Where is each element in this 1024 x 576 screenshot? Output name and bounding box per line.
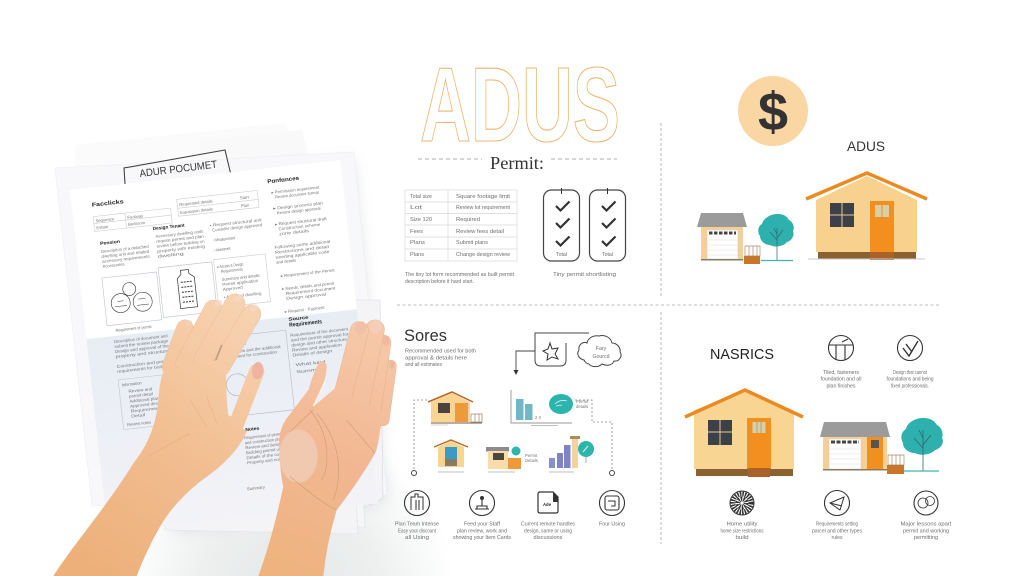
caption: table: description before it hard start. [405, 279, 474, 285]
text box: lower left: Requirement [130, 405, 162, 414]
text column: design [152, 221, 207, 259]
deck [745, 246, 760, 256]
text: funnel: Requirements setting [816, 522, 858, 528]
text block: notes: Building permit unit [246, 446, 285, 455]
heading: source requirements: Requirements [289, 319, 322, 329]
text: sores: and all estimates [405, 362, 442, 368]
text column: notes [209, 217, 265, 253]
illustration: garage [697, 213, 760, 264]
text block: source: Summary [296, 366, 328, 374]
text: check: fixed professionals. [891, 384, 929, 390]
table: left: Sequence [95, 216, 115, 223]
text column: pension [100, 236, 151, 269]
icon: frame [600, 490, 624, 516]
icon: dollar: $ [758, 82, 788, 142]
illustration: shop: Permit [525, 453, 538, 458]
text column: pension: Pension [100, 239, 120, 246]
text: funnel: rules [832, 535, 843, 541]
table: right [177, 190, 259, 216]
table: permit: Change design review [456, 252, 510, 258]
text: sores [405, 348, 476, 368]
title: ADUS: ADUS [420, 46, 620, 164]
divider: horizontal [397, 304, 941, 306]
text: document [521, 522, 575, 541]
caption: box: Requirement of permit [115, 324, 152, 333]
deck [888, 455, 904, 465]
text block: notes: Requirement of permit [244, 431, 283, 440]
text box: lower left [118, 373, 185, 430]
text column: notes: Consider design approved [212, 222, 263, 233]
text: stamp: showing your Item Cards [453, 535, 511, 541]
heading: NASRICS: NASRICS [710, 346, 774, 363]
text: circles [900, 522, 952, 541]
icon: star box [535, 333, 589, 366]
text block: notes: Review and design [245, 441, 284, 450]
text block: lower left: Description of document and [114, 333, 169, 344]
text block: lower left: requirements for building [117, 363, 172, 374]
table: permit: Plans [410, 252, 424, 258]
text column: design: review before building on [156, 238, 205, 249]
table: right: Start [240, 194, 250, 200]
text: sores: approval & details here [405, 356, 467, 362]
text column: right: needing applicable code [275, 249, 330, 260]
text: circles: permit and working [903, 528, 949, 534]
connector: left dashed [412, 400, 427, 476]
text: document: Current remote handles [521, 522, 575, 528]
text box: checklist: Requirements [221, 267, 243, 274]
text column: right: ▸ Requirement of the Permit [280, 267, 335, 278]
icon: clipboard 2 [590, 188, 626, 261]
text box: checklist: Approved [223, 285, 244, 292]
chart: bars one: Permit [576, 399, 589, 404]
text column: right [268, 184, 339, 314]
icon: post [828, 336, 854, 360]
text box: checklist: Permit application [222, 278, 259, 287]
illustration box: building [158, 262, 217, 318]
illustration: tree two [901, 418, 943, 471]
text: document: design, same or using [524, 528, 572, 534]
text: stamp: plan review, work and [457, 528, 507, 534]
nails [251, 361, 264, 380]
text: stamp: Feed your Staff [464, 522, 501, 528]
illustration: main house [806, 173, 927, 260]
text: texture: home size restrictions [720, 528, 764, 534]
panel: document stack [55, 123, 387, 534]
text box: lower left: permit detail [129, 391, 153, 399]
text column: design: property with existing [157, 243, 206, 254]
text block: lower left: submit the review package [114, 338, 169, 349]
text column: right: ▸ Request · Payment [284, 305, 326, 314]
text column: right: ▸ Needs, details and permit [282, 281, 335, 291]
text box: checklist: ▸ Access & Design [217, 261, 244, 269]
text block: notes: Details of the code [246, 451, 285, 460]
table: permit: Plans [410, 240, 425, 246]
paper: back sheet [75, 123, 304, 200]
text: post: Tiled, fasteners [823, 370, 859, 376]
paper shadow [90, 160, 385, 530]
text: post [820, 370, 862, 390]
icon: check [898, 336, 922, 360]
heading: performance: Pɑnfɑnces [267, 176, 299, 185]
text column: right: Restrictions and detail [275, 244, 329, 255]
text block: lower left: Construction and permit [116, 358, 172, 369]
heading: ADUS: ADUS [847, 138, 885, 154]
text column: pension: Description of a detached [101, 244, 150, 254]
illustration: tree [758, 214, 794, 260]
table: permit [405, 190, 517, 261]
text: building: Easy your discount [398, 528, 436, 534]
heading: source requirements [288, 313, 322, 329]
text column: notes: • Measurement [213, 235, 236, 243]
text box: lower left: Review notes [127, 420, 151, 427]
text box: lower left: Approved design [130, 400, 165, 409]
chart: bars one: 2 3 [535, 415, 541, 420]
text column: notes: • Request structural unit [209, 217, 263, 228]
table: right: Plan [240, 202, 250, 208]
caption: footer: Summary [247, 484, 266, 491]
text column: design: require permit and plan [156, 234, 205, 244]
text column: right: Requirement document [285, 285, 337, 296]
text box: lower left: Detail [131, 412, 145, 419]
text block: notes: Notes [245, 426, 260, 432]
chart: bars one: details [576, 404, 588, 409]
text block: source: design and other structure [291, 336, 348, 348]
text block: lower left [114, 333, 172, 374]
illustration: shop: Details [525, 458, 538, 463]
icon: clipboard 1: Total [556, 252, 567, 258]
hand: left [53, 293, 264, 576]
icon: document: Ade [543, 502, 552, 507]
table: permit: Square footage limit [456, 194, 511, 200]
icon: cloud: Fary [596, 346, 607, 352]
table: permit: Review lot requirement [456, 205, 511, 211]
icon: clipboard 1 [544, 188, 580, 261]
palm creases [290, 410, 375, 510]
text box: checklist [214, 254, 270, 307]
text: funnel [812, 522, 862, 541]
illustration: house two [685, 390, 803, 477]
text box: checklist: Summary and details [221, 273, 260, 282]
text block: notes [243, 423, 286, 465]
text: document: discussions [534, 535, 563, 541]
heading: permit: Permit: [490, 153, 544, 173]
icon: dollar [738, 76, 808, 146]
icon: texture [730, 491, 754, 515]
table: permit: Review fees detail [456, 229, 504, 235]
text column: right: ▸ Design process plan [273, 200, 324, 211]
caption: table [405, 272, 515, 285]
table: right: Requested details [179, 198, 213, 207]
table: right: Expansion details [180, 206, 213, 215]
icon: circles [914, 491, 938, 515]
text column: right: ▸ Request structural draft [275, 216, 328, 227]
text column: right: and details [276, 258, 296, 265]
text box: checklist: Garage [224, 298, 239, 305]
table: permit: Lot [410, 205, 423, 211]
text: check: Design that cannot [893, 370, 927, 376]
icon: stamp [470, 490, 494, 516]
text: circles: Major lessons apart [900, 522, 952, 528]
text box: lower left: Review and [128, 386, 153, 394]
text: texture: build [736, 535, 749, 541]
text box: lower left: Information [121, 380, 142, 387]
illustration: small house [428, 392, 482, 425]
illustration: garage two [820, 422, 904, 474]
caption: clipboards: Tiny permit shortlisting [553, 272, 616, 278]
text column: right: Following some additional [274, 239, 331, 250]
text: post: foundation and all [820, 376, 862, 382]
table: left: Estate [96, 224, 109, 230]
front sheet [70, 160, 378, 533]
text column: design: Accessory dwelling units [155, 229, 204, 239]
text block: notes: Property and notes [247, 456, 285, 465]
illustration box: people [102, 272, 162, 326]
text box: lower middle: Permit review and the additional [219, 344, 281, 356]
text column: design: Design Tenant [152, 223, 185, 231]
chart: bars one [511, 390, 589, 426]
icon: cloud [578, 335, 621, 367]
text box: checklist: • Attached dwelling [223, 291, 262, 300]
table: permit: Total size [410, 194, 432, 200]
text block: source: Review and application [292, 342, 343, 353]
icon: cloud: Gourcd [592, 354, 610, 360]
text: building: Plan Team Intense [395, 522, 439, 528]
chart: bars two [549, 436, 594, 472]
text: check [886, 370, 934, 390]
text block: lower left: property and structure [115, 348, 170, 359]
caption: table: The tiny lot form recommended as built permit [405, 272, 515, 278]
divider: vertical top [660, 123, 662, 296]
text: check: foundations and being [886, 376, 934, 382]
heel of palm [279, 429, 318, 483]
icon: clipboard 2: Total [602, 252, 613, 258]
text column: notes: • Assessment [214, 246, 231, 252]
background shadow [120, 420, 460, 576]
table: permit: Fees [410, 229, 423, 235]
text column: design: dwelling [158, 251, 185, 259]
table: left: Bedroom [128, 220, 146, 227]
panel: costs [697, 76, 927, 264]
text block: source: Requirement of the document [290, 326, 349, 338]
table: permit: Submit plans [456, 240, 488, 246]
divider: vertical bottom [660, 312, 662, 544]
text column: right: Design approval [286, 292, 326, 301]
icon: building [404, 490, 430, 516]
text column: pension: dwelling unit and related [101, 249, 150, 259]
text column: pension: Accessories [102, 261, 125, 269]
text: frame: Four Using [599, 522, 625, 528]
panel: sources [395, 326, 625, 541]
text: texture: Home utility [726, 522, 758, 528]
text block: source: Details of design [292, 348, 333, 358]
fingertips [353, 320, 368, 336]
heading: sores: Sores [404, 326, 447, 345]
text box: lower middle [200, 330, 294, 419]
text column: right: ▸ Permission requirement [271, 185, 320, 195]
text box: lower middle: Design details [218, 341, 246, 349]
arrow: connector [514, 351, 535, 375]
paper: lower sheets [55, 152, 387, 506]
table: left [93, 208, 172, 232]
text block: lower left: Design and approval of the [115, 343, 170, 354]
text block: source [290, 326, 353, 374]
text box: lower middle: Requirement for construction [219, 349, 278, 361]
heading: source requirements: Source [288, 315, 309, 322]
title box: ADUR POCUMET: ADUR POCUMET [139, 158, 218, 180]
text block: source: What kind [295, 359, 327, 367]
text: sores: Recommended used for both [405, 348, 476, 354]
divider: permit dashes [418, 158, 617, 160]
table: left: Footway [127, 213, 144, 220]
heading: facilities: Facclicks [92, 199, 124, 209]
text: building [395, 522, 439, 541]
illustration: small house two [434, 440, 468, 472]
text: texture [720, 522, 764, 541]
text: circles: permitting [914, 535, 938, 541]
text: post: plan finishes [826, 384, 856, 390]
table: permit: Size 120 [410, 217, 432, 223]
panel: basics [685, 336, 952, 541]
text box: lower left: Additional plan [129, 395, 160, 404]
text column: pension: accessory requirements [102, 254, 150, 264]
panel: permit [405, 46, 626, 285]
text block: notes: and construction plan [245, 436, 283, 445]
illustration: shop [486, 446, 538, 472]
text column: right: Construction scheme [278, 222, 321, 231]
text: building: all Using [405, 535, 429, 541]
text column: right: Review design approval [276, 206, 321, 215]
icon: funnel [824, 490, 850, 516]
title box: ADUR POCUMET [124, 150, 231, 184]
text: funnel: parcel and other types [812, 528, 862, 534]
table: permit: Required [456, 217, 480, 223]
connector: right dashed [575, 400, 614, 476]
text column: right: Review document format [275, 190, 320, 200]
icon: document [538, 492, 558, 513]
text block: source: and the permit approval for [291, 331, 349, 343]
text column: right: zone details [279, 228, 309, 236]
text: stamp [453, 522, 511, 541]
hand: right [258, 318, 395, 576]
